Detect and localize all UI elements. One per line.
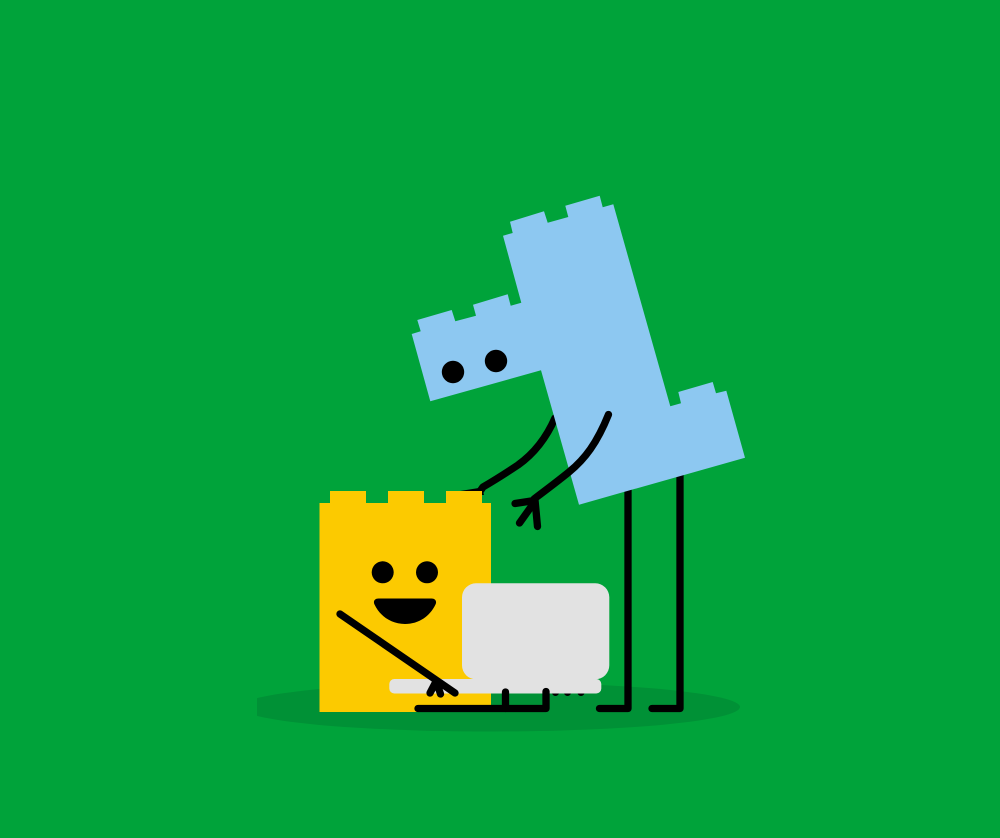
yellow character legs: [418, 692, 546, 708]
laptop base: [389, 679, 601, 694]
yellow character arm and hand: [340, 614, 455, 694]
yellow character smile: [374, 598, 436, 624]
laptop screen: [462, 583, 609, 679]
blue character front arm and hand: [515, 414, 608, 526]
blue block character body: [412, 196, 745, 505]
yellow character eyes: [372, 561, 438, 583]
ground shadow: [240, 682, 740, 732]
laptop: [389, 583, 609, 694]
blue character legs: [600, 470, 680, 708]
blue character back arm: [460, 418, 555, 500]
yellow block character body: [320, 491, 491, 712]
blue character eyes: [442, 350, 507, 383]
illustration: two block characters at a laptop: [257, 196, 745, 732]
yellow character toes: [552, 689, 584, 696]
